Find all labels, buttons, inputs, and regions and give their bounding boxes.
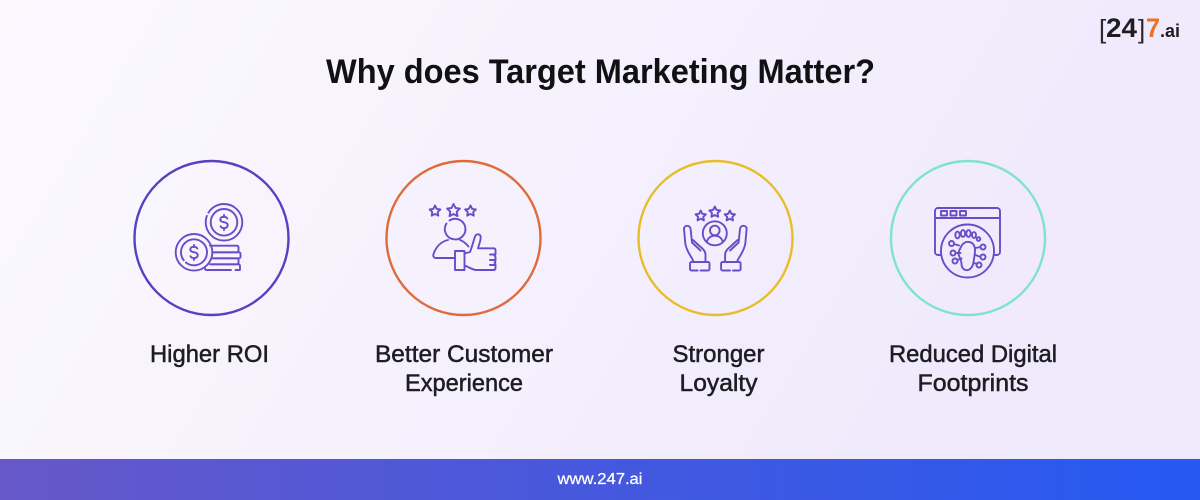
label: Reduced Digital (889, 341, 1057, 368)
item: Stronger Loyalty (638, 161, 792, 397)
item: Better Customer Experience (375, 161, 553, 397)
logo: [24]7.ai: 7 (1146, 13, 1160, 43)
logo: [24]7.ai: 24 (1106, 13, 1137, 43)
logo: [24]7.ai: ] (1138, 14, 1145, 44)
item: Stronger Loyalty: Loyalty (680, 370, 758, 397)
label: Better Customer (375, 341, 553, 368)
label: Higher ROI (150, 341, 269, 368)
circle: orange ring (386, 161, 540, 315)
icon: coins (176, 204, 242, 271)
circle: purple ring (134, 161, 288, 315)
item: Reduced Digital Footprints: Footprints (918, 370, 1028, 397)
icon: customer with stars and thumbs up (430, 204, 496, 270)
title: Why does Target Marketing Matter? (326, 53, 875, 91)
circle: yellow ring (638, 161, 792, 315)
logo: [24]7.ai: .ai (1160, 21, 1180, 41)
icon: browser window with footprint (935, 208, 1000, 278)
item: Reduced Digital Footprints (889, 161, 1057, 397)
icon: hands holding person with stars (684, 206, 747, 270)
logo: [24]7.ai (1099, 13, 1180, 44)
footer bar with website: www.247.ai (556, 471, 642, 488)
label: Stronger (672, 341, 764, 368)
item: Higher ROI (134, 161, 288, 368)
logo: [24]7.ai: [ (1099, 14, 1107, 44)
footer bar with website (0, 459, 1200, 500)
circle: teal ring (891, 161, 1045, 315)
item: Better Customer Experience: Experience (405, 370, 523, 397)
